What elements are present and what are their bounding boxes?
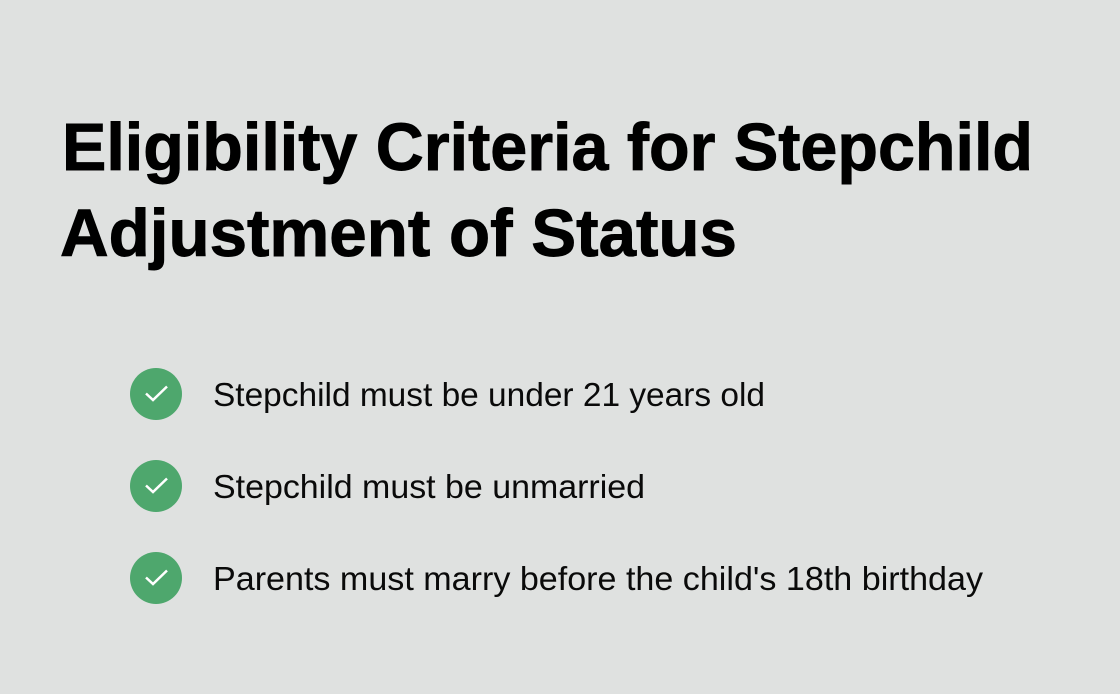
title: Eligibility Criteria for Stepchild (62, 110, 1033, 185)
title: Adjustment of Status (60, 196, 737, 271)
title (60, 110, 1033, 271)
criterion: marriage timing (130, 552, 984, 604)
criterion: age: Stepchild must be under 21 years old (213, 376, 765, 413)
criterion: unmarried: Stepchild must be unmarried (213, 468, 645, 505)
criterion: marriage timing: Parents must marry before the child's 18th birthday (213, 560, 984, 597)
criterion: unmarried (130, 460, 645, 512)
criteria list (130, 368, 984, 604)
criterion: age (130, 368, 765, 420)
